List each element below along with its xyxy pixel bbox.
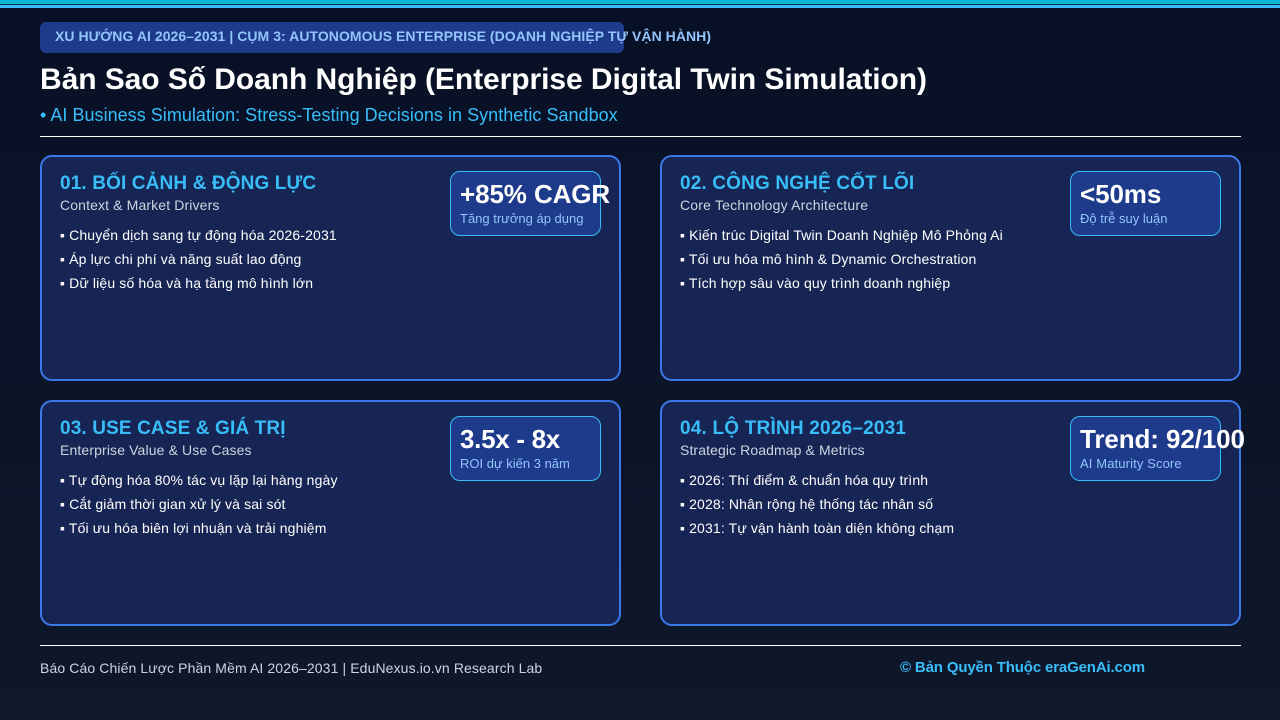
panel 04 metric: AI Maturity Score <box>1080 456 1182 471</box>
panel 03 metric: 3.5x - 8x <box>460 424 560 454</box>
panel 03 metric: ROI dự kiến 3 năm <box>460 456 570 471</box>
panel 02 bullet 1: ▪ Kiến trúc Digital Twin Doanh Nghiệp Mô Phỏng Ai <box>680 227 1003 243</box>
panel 02 metric: <50ms <box>1080 179 1161 209</box>
panel 03 metric <box>450 416 601 481</box>
panel 01 metric: +85% CAGR <box>460 179 610 209</box>
panel 02 heading: 02. CÔNG NGHỆ CỐT LÕI <box>680 173 914 194</box>
footer copyright: © Bản Quyền Thuộc eraGenAi.com <box>900 659 1145 676</box>
panel 04 bullet 2: ▪ 2028: Nhân rộng hệ thống tác nhân số <box>680 496 933 512</box>
panel: 04 roadmap <box>660 400 1241 626</box>
subtitle: • AI Business Simulation: Stress-Testing Decisions in Synthetic Sandbox <box>40 105 618 125</box>
top accent bar <box>0 0 1280 8</box>
panel: 01 context <box>40 155 621 381</box>
panel: 03 use cases <box>40 400 621 626</box>
panel 04 metric <box>1070 416 1221 481</box>
panel 02 bullet 3: ▪ Tích hợp sâu vào quy trình doanh nghiệp <box>680 275 950 291</box>
panel 03 subheading: Enterprise Value & Use Cases <box>60 442 252 458</box>
category badge <box>40 22 624 53</box>
panel 01 metric: Tăng trưởng áp dụng <box>460 211 583 226</box>
title: Bản Sao Số Doanh Nghiệp (Enterprise Digital Twin Simulation) <box>40 63 927 96</box>
panel 04 heading: 04. LỘ TRÌNH 2026–2031 <box>680 418 906 439</box>
panel 03 heading: 03. USE CASE & GIÁ TRỊ <box>60 418 286 439</box>
panel: 02 technology <box>660 155 1241 381</box>
panel 02 metric <box>1070 171 1221 236</box>
panel 01 bullet 2: ▪ Áp lực chi phí và năng suất lao động <box>60 251 301 267</box>
panel 02 subheading: Core Technology Architecture <box>680 197 868 213</box>
footer source: Báo Cáo Chiến Lược Phần Mềm AI 2026–2031 | EduNexus.io.vn Research Lab <box>40 660 542 676</box>
category badge: XU HƯỚNG AI 2026–2031 | CỤM 3: AUTONOMOUS ENTERPRISE (DOANH NGHIỆP TỰ VẬN HÀNH) <box>55 28 711 44</box>
panel 03 bullet 3: ▪ Tối ưu hóa biên lợi nhuận và trải nghiệm <box>60 520 327 536</box>
panel 04 subheading: Strategic Roadmap & Metrics <box>680 442 865 458</box>
panel 01 bullet 1: ▪ Chuyển dịch sang tự động hóa 2026-2031 <box>60 227 337 243</box>
panel 01 metric <box>450 171 601 236</box>
panel 01 subheading: Context & Market Drivers <box>60 197 220 213</box>
panel 02 bullet 2: ▪ Tối ưu hóa mô hình & Dynamic Orchestration <box>680 251 976 267</box>
panel 03 bullet 1: ▪ Tự động hóa 80% tác vụ lặp lại hàng ngày <box>60 472 338 488</box>
panel 01 heading: 01. BỐI CẢNH & ĐỘNG LỰC <box>60 173 316 194</box>
panel 04 bullet 3: ▪ 2031: Tự vận hành toàn diện không chạm <box>680 520 954 536</box>
panel 01 bullet 3: ▪ Dữ liệu số hóa và hạ tầng mô hình lớn <box>60 275 313 291</box>
panel 04 metric: Trend: 92/100 <box>1080 424 1245 454</box>
panel 02 metric: Độ trễ suy luận <box>1080 211 1167 226</box>
panel 03 bullet 2: ▪ Cắt giảm thời gian xử lý và sai sót <box>60 496 286 512</box>
panel 04 bullet 1: ▪ 2026: Thí điểm & chuẩn hóa quy trình <box>680 472 928 488</box>
